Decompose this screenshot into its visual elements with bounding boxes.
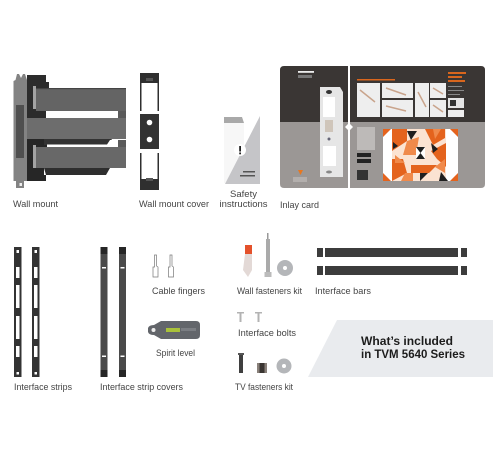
- label: interface strip covers: Interface strip covers: [100, 382, 183, 393]
- inlay card mosaic artwork: [383, 129, 458, 181]
- icon: interface strip covers: [100, 247, 126, 377]
- label: inlay card: Inlay card: [280, 200, 319, 211]
- label: tv fasteners kit: TV fasteners kit: [235, 382, 293, 393]
- label: wall mount cover: Wall mount cover: [139, 199, 209, 210]
- label: interface bolts: Interface bolts: [238, 328, 296, 339]
- icon: wall mount: [14, 74, 126, 188]
- label: safety instructions: Safety: [230, 189, 257, 200]
- icon: interface bars: [317, 248, 467, 275]
- icon: cable fingers: [153, 255, 174, 277]
- label: spirit level: Spirit level: [156, 348, 195, 359]
- icon: wall fasteners kit: [243, 233, 293, 277]
- icon: wall mount cover: [140, 73, 159, 190]
- heading: what's included: in TVM 5640 Series: [361, 349, 465, 361]
- label: wall mount: Wall mount: [13, 199, 58, 210]
- icon: safety instructions booklet: [224, 116, 260, 184]
- label: cable fingers: Cable fingers: [152, 286, 205, 297]
- icon: interface strips: [14, 247, 40, 377]
- label: interface strips: Interface strips: [14, 382, 72, 393]
- label: wall fasteners kit: Wall fasteners kit: [237, 286, 302, 297]
- label: interface bars: Interface bars: [315, 286, 371, 297]
- icon: interface bolts: [237, 312, 262, 322]
- icon: inlay card: [280, 66, 485, 188]
- label: safety instructions: instructions: [219, 199, 268, 210]
- heading: what's included: What’s included: [361, 336, 453, 348]
- icon: spirit level: [148, 321, 200, 339]
- icon: tv fasteners kit: [238, 353, 292, 374]
- panel: what's included banner: [308, 320, 493, 377]
